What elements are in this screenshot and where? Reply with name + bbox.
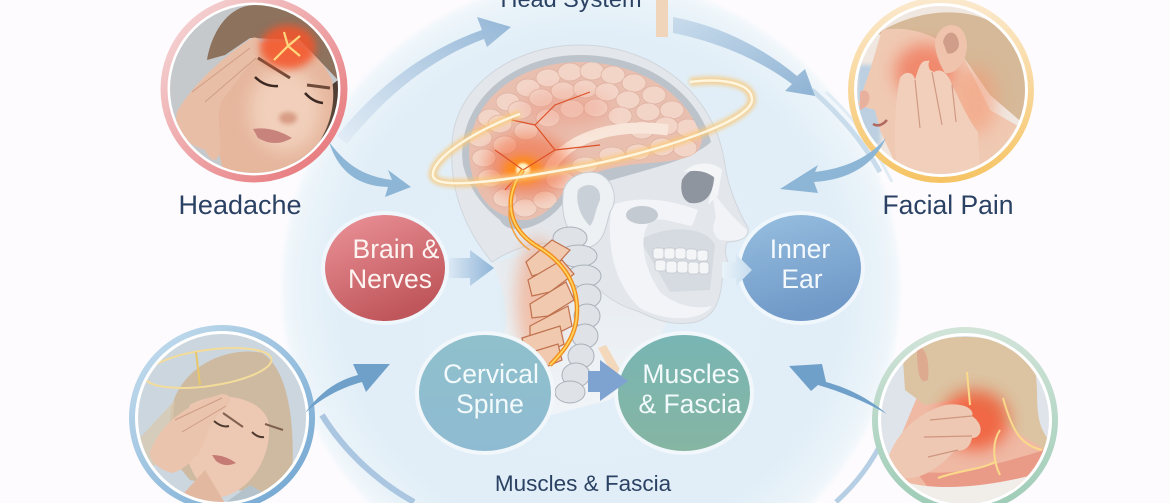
arrow: top right arc — [673, 17, 815, 96]
arrow: top left arc — [337, 17, 511, 144]
node: Cervical Spine: Cervical — [443, 359, 539, 389]
eye socket — [681, 168, 714, 203]
glow ring — [433, 81, 752, 183]
label: Facial Pain: Facial Pain — [882, 190, 1014, 220]
node: Inner Ear: Ear — [781, 264, 823, 294]
node: Brain & Nerves: Brain & — [353, 234, 440, 264]
node: Muscles & Fascia: & Fascia — [638, 389, 742, 419]
nose — [712, 190, 747, 241]
vertebrae left — [522, 240, 574, 366]
teeth — [653, 248, 709, 274]
photo: facial pain — [851, 0, 1031, 180]
skull details — [640, 229, 715, 292]
pain glow — [486, 133, 570, 197]
spine glow — [516, 238, 560, 362]
node: Inner Ear: Inner — [770, 234, 830, 264]
node: Cervical Spine — [417, 333, 553, 453]
brain — [469, 62, 702, 220]
nerve — [509, 170, 577, 365]
arrow: neck pain to center — [789, 364, 887, 414]
label: Muscles & Fascia: Muscles & Fascia — [495, 471, 672, 496]
icon: head system stem — [656, 0, 668, 37]
arrow: spine to muscles — [588, 360, 628, 401]
ear — [563, 172, 614, 247]
node: Brain & Nerves — [321, 211, 449, 325]
node: Brain & Nerves: Nerves — [348, 264, 432, 294]
peach stem — [598, 345, 626, 385]
node: Muscles & Fascia: Muscles — [642, 359, 740, 389]
photo: dizziness — [129, 325, 315, 503]
label: Headache: Headache — [178, 190, 302, 220]
neck — [492, 240, 668, 420]
arrow: facial pain to center — [780, 138, 886, 193]
vertebrae right — [553, 227, 601, 403]
illustration: head and brain — [433, 45, 752, 420]
arrow: skull to inner ear — [722, 254, 752, 286]
outer ring arcs — [322, 90, 892, 502]
node: Inner Ear — [737, 211, 865, 325]
node: Muscles & Fascia — [616, 333, 752, 453]
photo: headache — [163, 0, 345, 180]
photo: neck pain — [872, 327, 1058, 503]
skull inner rim — [462, 55, 711, 229]
node: Cervical Spine: Spine — [456, 389, 524, 419]
arrow: brain to spine — [449, 250, 494, 286]
arrow: headache to center — [329, 142, 411, 197]
skull outline — [452, 45, 748, 324]
arrow: dizziness to center — [305, 364, 390, 413]
